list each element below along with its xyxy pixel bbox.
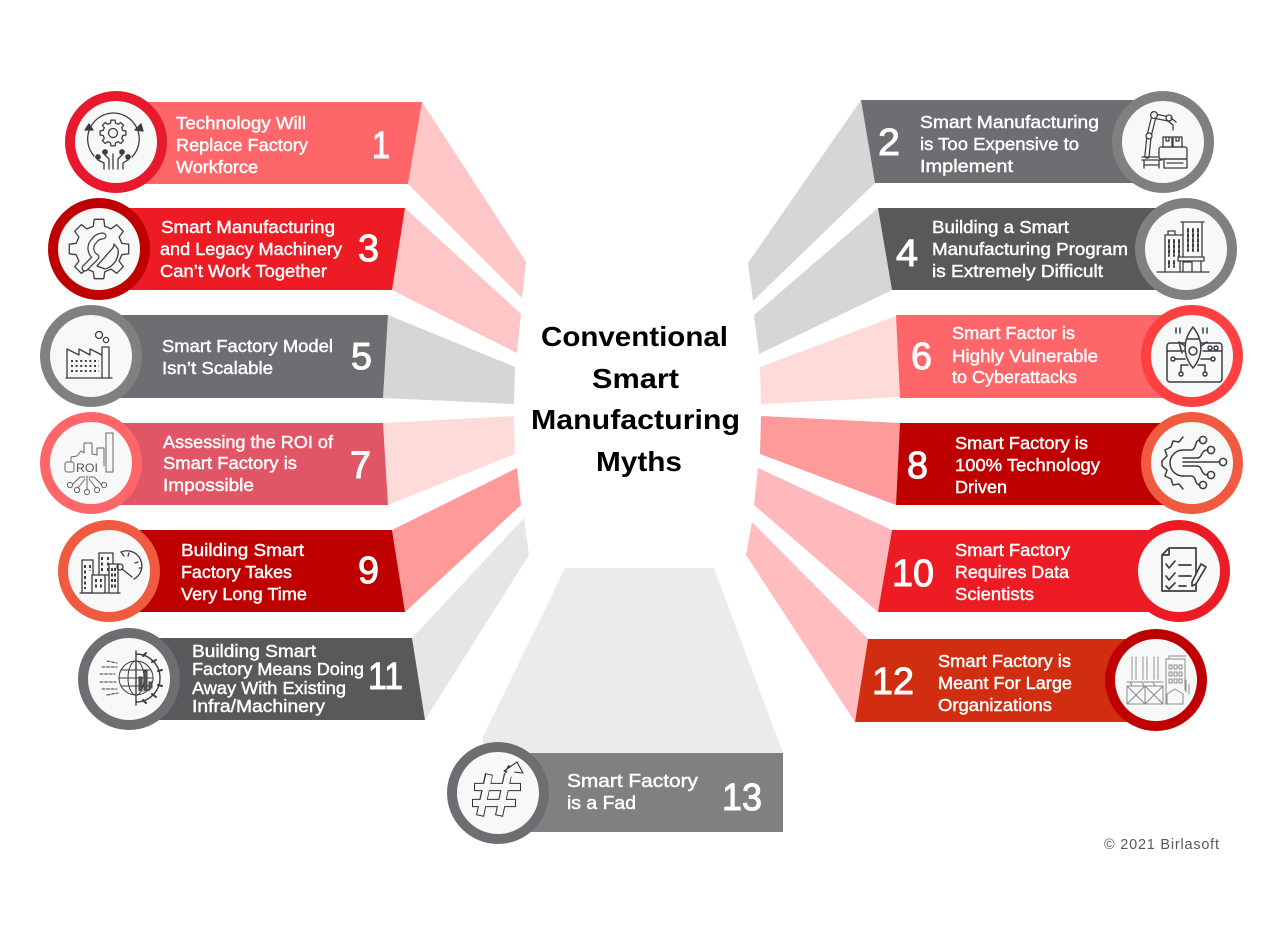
perspective shadow 12: [746, 522, 868, 722]
badge 11: [78, 628, 180, 730]
text 2: Implement: [920, 156, 1013, 176]
text 2: Smart Manufacturing: [920, 112, 1099, 132]
text 9: Building Smart: [181, 540, 304, 560]
myth 9: [58, 468, 521, 622]
badge 13: [447, 742, 549, 844]
number 4: 4: [896, 233, 918, 275]
number 10: 10: [892, 553, 934, 595]
perspective shadow 9: [392, 468, 521, 612]
perspective shadow 5: [383, 315, 515, 404]
badge 6: [1141, 305, 1243, 407]
icon: city and gauge: [80, 551, 142, 593]
badge 7: [40, 412, 142, 514]
bar 11: [129, 638, 425, 720]
text 10: Requires Data: [955, 562, 1069, 582]
bar 6: [896, 315, 1192, 398]
badge 2: [1112, 91, 1214, 193]
badge 10: [1128, 520, 1230, 622]
bar 10: [878, 530, 1179, 612]
badge 3: [48, 198, 150, 300]
perspective shadow 11: [412, 518, 529, 720]
text 6: [952, 323, 1098, 387]
myth 5: [40, 305, 515, 407]
bar 13: [498, 753, 783, 832]
text 1: Replace Factory: [176, 135, 308, 155]
badge 1: [65, 91, 167, 193]
text 6: Highly Vulnerable: [952, 346, 1098, 366]
title: Conventional: [541, 321, 728, 352]
icon: gear and wrench: [69, 219, 129, 279]
text 10: Scientists: [955, 584, 1034, 604]
text 3: Smart Manufacturing: [161, 217, 335, 237]
bar 7: [91, 423, 388, 505]
text 12: Smart Factory is: [938, 651, 1071, 671]
text 5: Isn’t Scalable: [162, 358, 273, 378]
bar 4: [878, 208, 1186, 290]
text 4: [932, 217, 1128, 281]
myth 13: [447, 568, 783, 844]
perspective shadow 13: [483, 568, 783, 753]
text 1: Workforce: [176, 157, 258, 177]
icon: ROI: [65, 433, 113, 495]
myth 12: [746, 522, 1207, 731]
icon: gear with circuit: [85, 113, 143, 169]
text 11: Away With Existing: [192, 678, 346, 698]
text 1: [176, 113, 308, 177]
text 7: Assessing the ROI of: [163, 432, 333, 452]
bar 9: [109, 530, 405, 612]
number 5: 5: [351, 336, 372, 378]
text 1: Technology Will: [176, 113, 306, 133]
text 2: [920, 112, 1099, 176]
text 8: Smart Factory is: [955, 433, 1088, 453]
perspective shadow 7: [383, 416, 515, 505]
text 7: Smart Factory is: [163, 453, 297, 473]
badge 9: [58, 520, 160, 622]
text 13: Smart Factory: [567, 771, 698, 791]
text 7: [163, 432, 333, 495]
number 13: 13: [722, 777, 762, 819]
badge 12: [1105, 629, 1207, 731]
number 1: 1: [372, 125, 390, 167]
text 4: Manufacturing Program: [932, 239, 1128, 259]
perspective shadow 8: [760, 416, 900, 505]
icon: office building: [1157, 222, 1209, 272]
bar 12: [855, 639, 1156, 722]
text 5: Smart Factory Model: [162, 336, 333, 356]
text 9: Factory Takes: [181, 562, 292, 582]
copyright footer: © 2021 Birlasoft: [1104, 837, 1219, 853]
bar 5: [91, 315, 388, 398]
bar 8: [896, 423, 1192, 505]
text 13: is a Fad: [567, 793, 636, 813]
text 6: to Cyberattacks: [952, 367, 1077, 387]
perspective shadow 10: [754, 468, 892, 612]
perspective shadow 2: [748, 100, 875, 301]
myth 8: [760, 412, 1243, 514]
text 8: Driven: [955, 477, 1007, 497]
text 3: and Legacy Machinery: [160, 239, 342, 259]
myth 7: [40, 412, 515, 514]
text 8: 100% Technology: [955, 455, 1100, 475]
icon: gear with circuit lines: [1162, 436, 1227, 489]
text 10: Smart Factory: [955, 540, 1070, 560]
number 2: 2: [878, 122, 900, 164]
title: Manufacturing: [531, 404, 740, 435]
number 8: 8: [907, 445, 928, 487]
myth 10: [754, 468, 1230, 622]
myth 4: [754, 198, 1237, 354]
icon: robot arm: [1142, 112, 1187, 168]
text 13: [567, 771, 698, 813]
myth 1: [65, 91, 526, 298]
icon: industrial plant: [1127, 656, 1189, 704]
myth 2: [748, 91, 1214, 301]
perspective shadow 6: [760, 316, 900, 404]
perspective shadow 1: [408, 102, 526, 298]
title: Myths: [596, 446, 682, 477]
myth 11: [78, 518, 529, 730]
perspective shadow 3: [392, 208, 521, 353]
text 3: [160, 217, 342, 281]
number 3: 3: [358, 228, 379, 270]
number 6: 6: [911, 336, 932, 378]
icon: globe, gear and circuit: [100, 651, 162, 705]
icon label: ROI: ROI: [76, 461, 98, 475]
number 9: 9: [358, 550, 379, 592]
icon: factory: [66, 332, 112, 378]
text 11: Factory Means Doing: [192, 659, 364, 679]
text 4: Building a Smart: [932, 217, 1069, 237]
text 12: Meant For Large: [938, 673, 1072, 693]
text 3: Can’t Work Together: [160, 261, 327, 281]
text 6: Smart Factor is: [952, 323, 1075, 343]
text 12: [938, 651, 1072, 715]
text 10: [955, 540, 1070, 604]
myth 3: [48, 198, 521, 353]
icon: checklist and pencil: [1162, 548, 1206, 591]
title: Smart: [592, 363, 679, 394]
text 12: Organizations: [938, 695, 1052, 715]
title: [531, 321, 740, 477]
bar 1: [116, 102, 422, 184]
badge 5: [40, 305, 142, 407]
text 11: [192, 641, 364, 716]
badge 4: [1135, 198, 1237, 300]
bar 3: [99, 208, 405, 290]
badge 8: [1141, 412, 1243, 514]
text 9: [181, 540, 307, 604]
number 11: 11: [368, 656, 403, 698]
number 12: 12: [872, 661, 914, 703]
text 5: [162, 336, 333, 378]
icon: rocket in browser: [1167, 327, 1222, 382]
text 9: Very Long Time: [181, 584, 307, 604]
text 7: Impossible: [163, 475, 254, 495]
text 2: is Too Expensive to: [920, 134, 1079, 154]
icon: hashtag with arrow: [472, 762, 523, 816]
text 8: [955, 433, 1100, 497]
perspective shadow 4: [754, 208, 892, 354]
bar 2: [861, 100, 1163, 183]
text 11: Infra/Machinery: [192, 696, 325, 716]
myth 6: [760, 305, 1243, 407]
text 11: Building Smart: [192, 641, 316, 661]
text 4: is Extremely Difficult: [932, 261, 1103, 281]
number 7: 7: [350, 445, 371, 487]
